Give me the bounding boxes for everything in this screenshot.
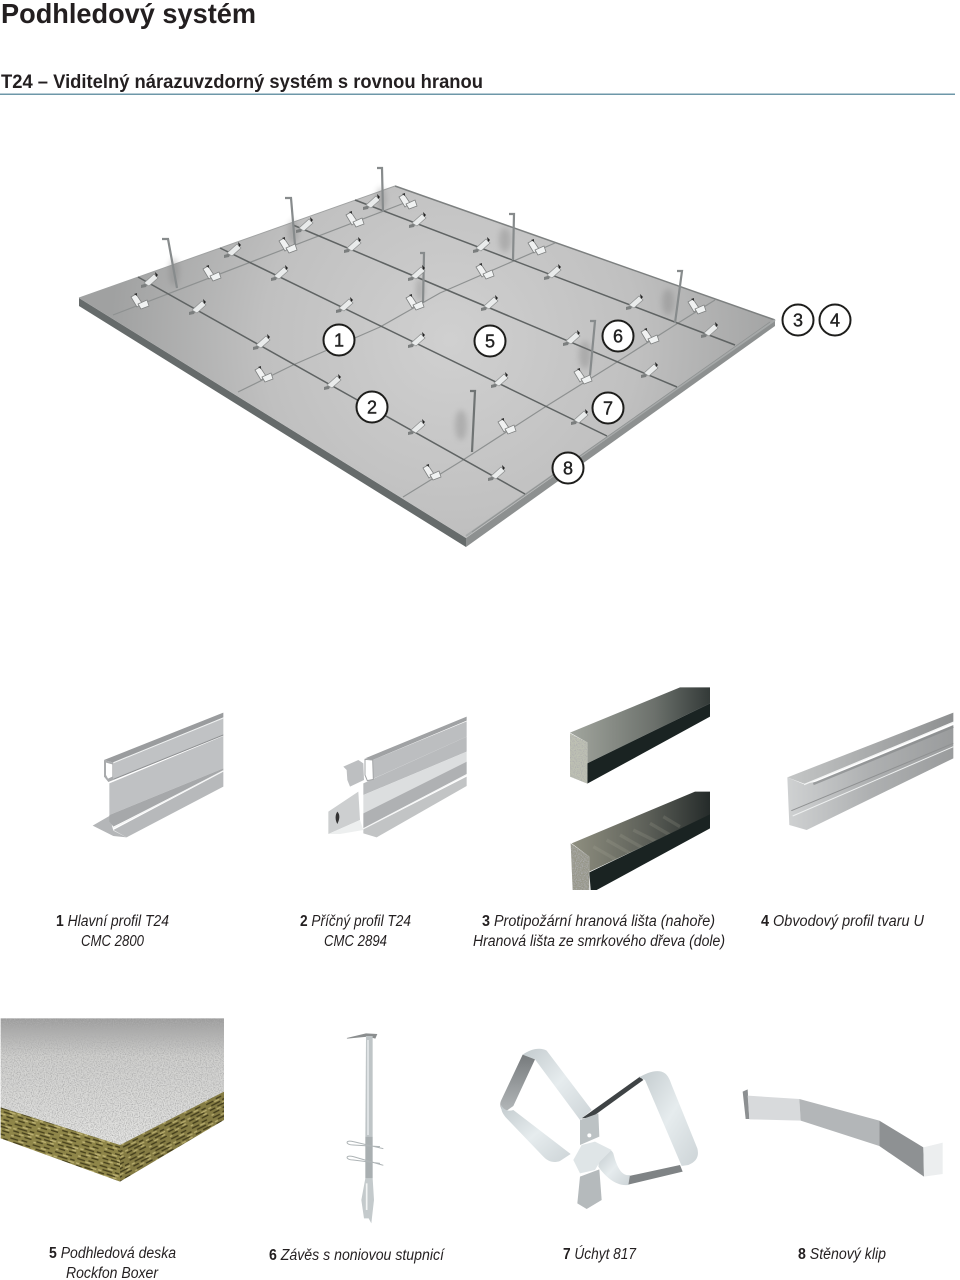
clips on cross profiles xyxy=(131,193,706,480)
bottom bar xyxy=(571,792,710,890)
hangers xyxy=(162,168,682,452)
caption 1: 1 Hlavní profil T24 xyxy=(56,913,169,930)
cross profiles xyxy=(113,202,715,497)
caption 2: CMC 2894 xyxy=(324,933,387,950)
caption 4: 4 Obvodový profil tvaru U xyxy=(761,913,925,930)
caption 8: 8 Stěnový klip xyxy=(798,1246,886,1263)
badge numbers: 2 xyxy=(367,398,377,418)
caption 3: 3 Protipožární hranová lišta (nahoře) xyxy=(482,913,715,930)
caption 7: 7 Úchyt 817 xyxy=(563,1246,637,1263)
caption 3: Hranová lišta ze smrkového dřeva (dole) xyxy=(473,933,725,950)
caption 5: 5 Podhledová deska xyxy=(49,1245,176,1262)
caption 2: 2 Příčný profil T24 xyxy=(300,913,411,930)
top bar xyxy=(570,687,710,784)
subtitle: T24 – Viditelný nárazuvzdorný systém s rovnou hranou xyxy=(1,72,483,93)
item 7: clip 817 xyxy=(500,1049,698,1209)
badge numbers: 5 xyxy=(485,332,495,352)
main profiles xyxy=(138,200,735,494)
number badges xyxy=(324,304,850,484)
right loop xyxy=(582,1071,698,1185)
caption 1 xyxy=(56,913,169,950)
item 6: hanger with vernier xyxy=(347,1033,383,1223)
caption 5 xyxy=(49,1245,176,1280)
item 5: ceiling board Rockfon Boxer xyxy=(1,1018,224,1182)
main illustration: ceiling system xyxy=(79,168,850,547)
ceiling panel xyxy=(79,186,775,547)
badge numbers: 8 xyxy=(563,458,573,478)
clips on main profiles xyxy=(141,194,718,481)
badge numbers: 3 xyxy=(793,310,803,330)
item 2: cross profile T24 xyxy=(328,717,467,837)
badge numbers: 1 xyxy=(334,330,344,350)
hanger shadows xyxy=(169,187,674,440)
item 8: wall clip xyxy=(743,1089,943,1177)
caption 2 xyxy=(300,913,411,950)
badge numbers: 6 xyxy=(613,326,623,346)
item 3: fire-resistant edge bar (top) and spruce edge bar (bottom) xyxy=(570,687,710,890)
caption 3 xyxy=(473,913,725,950)
badge numbers: 7 xyxy=(603,398,613,418)
badge numbers: 4 xyxy=(830,310,840,330)
left loop xyxy=(500,1049,592,1162)
centre plate and clamp xyxy=(573,1113,612,1209)
caption 6: 6 Závěs s noniovou stupnicí xyxy=(269,1247,446,1264)
item 1: main profile T24 xyxy=(93,713,223,837)
item 4: U-shaped perimeter profile xyxy=(787,713,953,830)
caption 1: CMC 2800 xyxy=(81,933,144,950)
badge numbers xyxy=(334,310,840,478)
